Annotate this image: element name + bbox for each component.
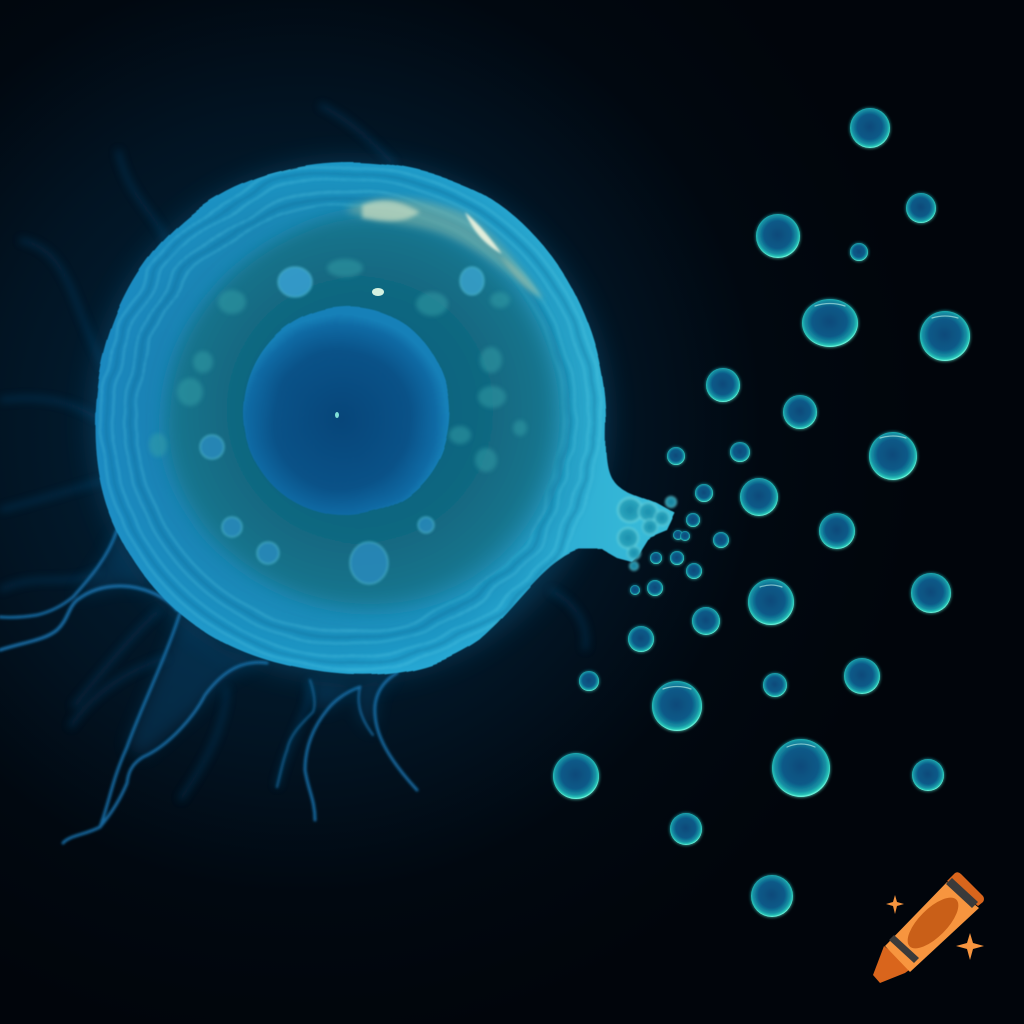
organelles — [149, 259, 527, 472]
sparkle large — [956, 933, 984, 960]
cell membrane with budding stem — [95, 162, 675, 675]
vesicles — [553, 108, 970, 917]
crayon tip — [873, 946, 912, 983]
icon: orange crayon with sparkles — [873, 872, 984, 983]
membrane texture — [100, 168, 600, 668]
tendril webs — [73, 530, 397, 757]
crayon cap — [947, 872, 984, 906]
bright organelle speck — [372, 288, 384, 296]
sparkle small — [886, 895, 904, 914]
nucleolus speck — [335, 412, 339, 418]
crayon body — [885, 882, 979, 972]
crayon oval label — [900, 890, 966, 956]
crayon top band — [946, 878, 978, 908]
crayon bottom band — [889, 935, 919, 963]
nucleus — [243, 306, 450, 516]
vesicle highlights — [663, 304, 958, 747]
bright highlight at top of cell — [345, 198, 545, 302]
cell with membrane, cytoplasm, nucleus and organelles — [95, 162, 677, 675]
cell outer glow — [92, 162, 608, 678]
faint tendrils behind the cell — [0, 105, 586, 800]
tendrils below the cell — [0, 530, 417, 843]
tendril strands — [0, 530, 417, 843]
cytoplasm — [164, 212, 565, 609]
bud at membrane opening — [617, 496, 677, 571]
